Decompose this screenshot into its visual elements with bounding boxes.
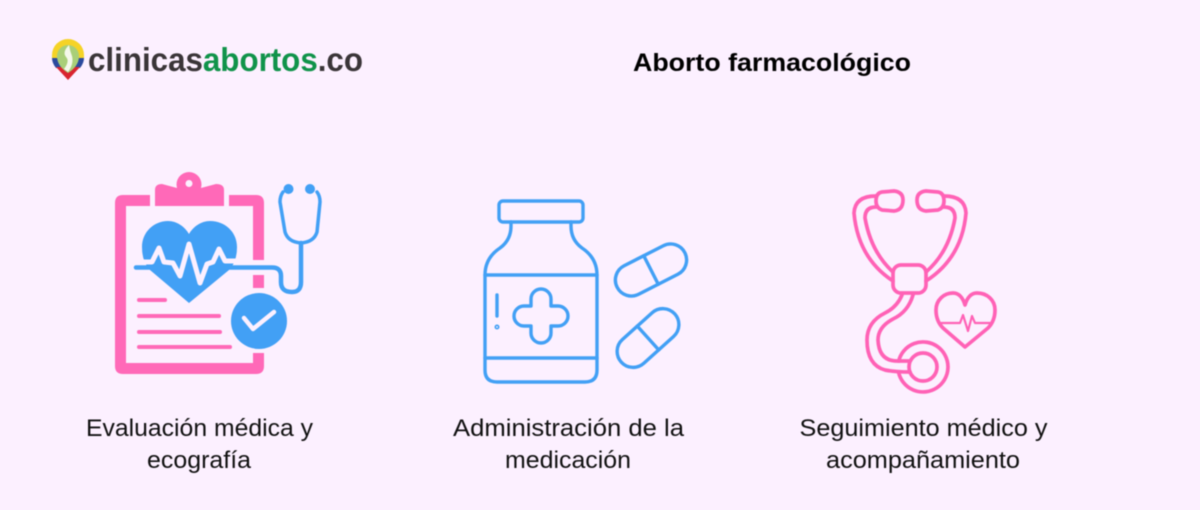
label: seguimiento médico y acompañamiento — [800, 415, 1048, 474]
icon: clipboard with heart, stethoscope and check — [115, 172, 320, 374]
small heart — [936, 293, 995, 347]
icon: stethoscope with heart — [854, 191, 995, 392]
panel: evaluación médica — [86, 172, 320, 474]
heart — [142, 221, 237, 303]
label: seguimiento médico y acompañamiento: acompañamiento — [826, 447, 1020, 474]
label: evaluación médica y ecografía: ecografía — [147, 447, 252, 474]
label: administración de la medicación: medicación — [505, 447, 631, 474]
label: evaluación médica y ecografía: Evaluación médica y — [86, 415, 313, 442]
stethoscope — [136, 184, 320, 292]
heartbeat line — [143, 244, 238, 283]
label: administración de la medicación — [453, 415, 685, 474]
clipboard frame — [115, 195, 264, 374]
icon: map pin with Colombian colours — [52, 39, 84, 80]
chest piece — [898, 342, 948, 392]
logo: clinicasabortos.co — [52, 39, 363, 80]
check badge — [231, 293, 287, 349]
document lines — [139, 300, 230, 347]
pill lower — [611, 302, 685, 374]
clipboard clip — [155, 172, 224, 206]
panel: administración de la medicación — [453, 201, 692, 474]
left tube and earpiece — [854, 191, 903, 281]
logo text: clinicasabortos.co — [88, 41, 363, 78]
tube to chest piece — [867, 295, 910, 372]
label: evaluación médica y ecografía — [86, 415, 313, 474]
right tube and earpiece — [917, 191, 966, 281]
icon: medicine bottle and pills — [485, 201, 692, 382]
panel: seguimiento médico y acompañamiento — [800, 191, 1048, 474]
label: administración de la medicación: Administración de la — [453, 415, 685, 442]
hub — [893, 265, 926, 293]
bottle — [485, 201, 597, 382]
label: seguimiento médico y acompañamiento: Seguimiento médico y — [800, 415, 1048, 442]
title: Aborto farmacológico — [633, 49, 911, 77]
pill upper — [610, 238, 692, 302]
